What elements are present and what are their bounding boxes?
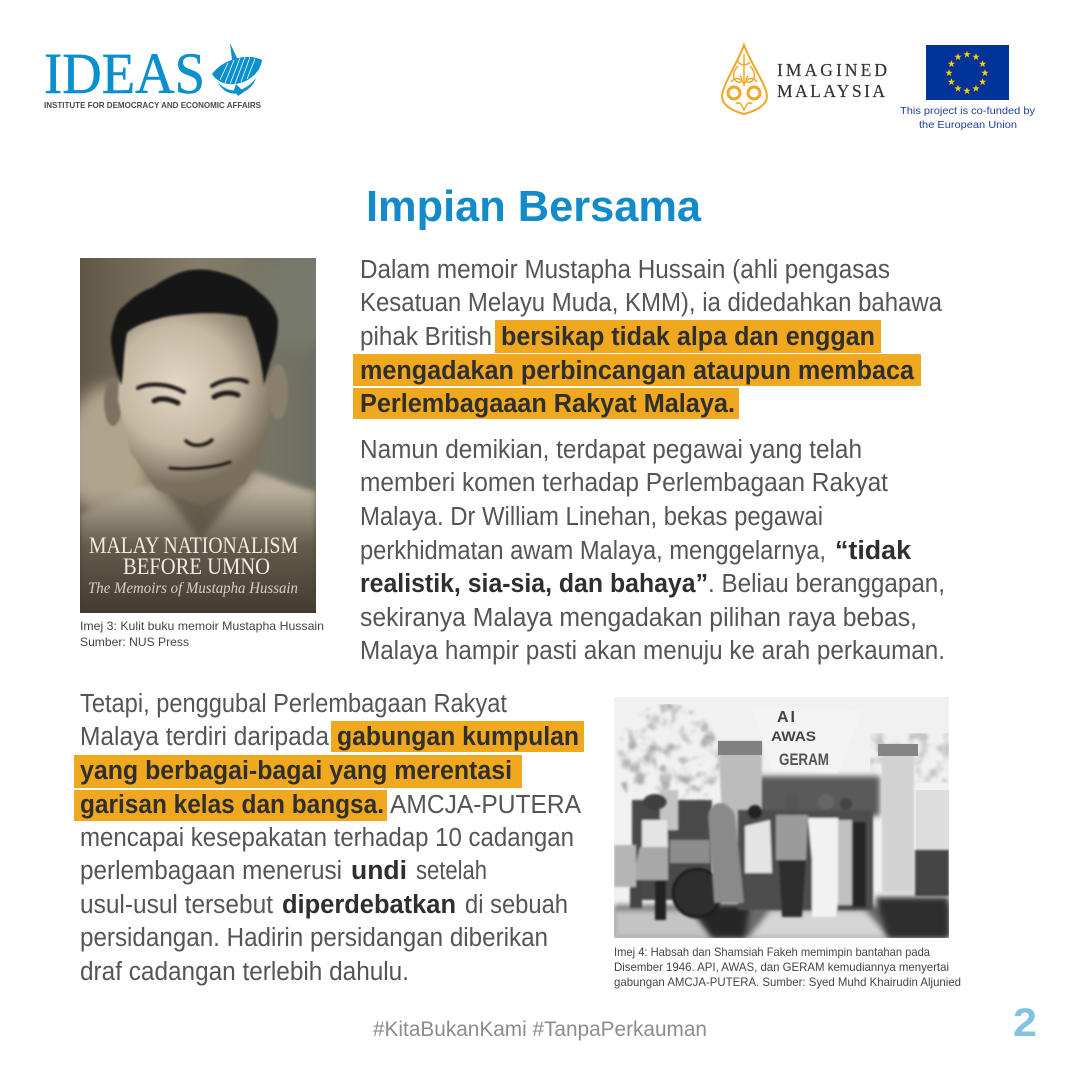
caption: image 4: Disember 1946. API, AWAS, dan GERAM kemudiannya menyertai [614, 960, 949, 974]
text block: paragraph 2 [360, 436, 945, 665]
banner: AWAS [771, 728, 816, 744]
book title [88, 533, 298, 597]
image: protest photo [614, 697, 949, 938]
text block: paragraph 2: Namun demikian, terdapat pegawai yang telah [360, 436, 862, 464]
trees [616, 704, 720, 800]
funding note [900, 105, 1036, 131]
text block: paragraph 3: persidangan. Hadirin persidangan diberikan [80, 924, 548, 952]
text block: paragraph 3: Tetapi, penggubal Perlembagaan Rakyat [80, 690, 507, 718]
bicycle group [614, 790, 721, 920]
text block: paragraph 3: garisan kelas dan bangsa. [80, 791, 384, 819]
logo: Imagined Malaysia [722, 45, 887, 114]
text block: paragraph 2: realistik, sia-sia, dan bahaya” [360, 570, 708, 598]
gate pillars [718, 741, 762, 850]
image: book cover [80, 258, 316, 613]
text block: paragraph 1: mengadakan perbincangan ataupun membaca [360, 357, 915, 385]
page number: 2 [1013, 1001, 1037, 1045]
text block: paragraph 1: bersikap tidak alpa dan enggan [501, 323, 875, 351]
caption: image 3 [80, 619, 324, 649]
book title: MALAY NATIONALISM [89, 533, 298, 558]
logo: Imagined Malaysia: MALAYSIA [777, 81, 885, 101]
hashtags: #KitaBukanKami #TanpaPerkauman [373, 1018, 707, 1041]
text block: paragraph 2: “tidak [835, 537, 912, 565]
text block: paragraph 3 [74, 690, 584, 986]
book title: BEFORE UMNO [123, 554, 270, 579]
funding note: the European Union [919, 119, 1017, 131]
text block: paragraph 3: mencapai kesepakatan terhadap 10 cadangan [80, 824, 574, 852]
text block: paragraph 3: yang berbagai-bagai yang merentasi [80, 757, 512, 785]
text block: paragraph 3: perlembagaan menerusi [80, 857, 342, 885]
text block: paragraph 3: di sebuah [465, 891, 568, 919]
text block: paragraph 2: . Beliau beranggapan, [708, 570, 945, 598]
icon: wayang leaf [722, 45, 767, 114]
banner [761, 711, 838, 774]
text block: paragraph 2: Malaya. Dr William Linehan, bekas pegawai [360, 503, 823, 531]
caption: image 4 [614, 945, 961, 989]
logo: European Union flag [926, 45, 1009, 100]
banner: A I [777, 709, 795, 726]
text block: paragraph 1: Dalam memoir Mustapha Hussain (ahli pengasas [360, 256, 890, 284]
caption: image 3: Sumber: NUS Press [80, 635, 189, 649]
face [118, 310, 271, 507]
logo: Imagined Malaysia: IMAGINED [777, 60, 887, 80]
text block: paragraph 3: setelah [416, 857, 487, 885]
text block: paragraph 3: gabungan kumpulan [337, 723, 579, 751]
text block: paragraph 3: undi [351, 857, 407, 885]
text block: paragraph 3: draf cadangan terlebih dahulu. [80, 958, 409, 986]
banner: GERAM [779, 750, 829, 769]
text block: paragraph 3: Malaya terdiri daripada [80, 723, 330, 751]
caption: image 4: Imej 4: Habsah dan Shamsiah Fakeh memimpin bantahan pada [614, 945, 930, 959]
highlight bars [74, 721, 584, 821]
text block: paragraph 1: Kesatuan Melayu Muda, KMM), ia didedahkan bahawa [360, 289, 943, 317]
logo: IDEAS: INSTITUTE FOR DEMOCRACY AND ECONOMIC AFFAIRS [44, 101, 262, 110]
caption: image 3: Imej 3: Kulit buku memoir Mustapha Hussain [80, 619, 324, 633]
icon: IDEAS bird [212, 43, 262, 96]
ears [104, 378, 122, 426]
eyes, brows, nose, mouth [138, 379, 247, 469]
text block: paragraph 2: perkhidmatan awam Malaya, menggelarnya, [360, 537, 826, 565]
ground [614, 905, 949, 938]
text block: paragraph 3: AMCJA-PUTERA [390, 791, 581, 819]
text block: paragraph 2: sekiranya Malaya mengadakan pilihan raya bebas, [360, 604, 917, 632]
text block: paragraph 1: pihak British [360, 323, 492, 351]
logo: IDEAS: IDEAS [44, 41, 205, 106]
shirt [80, 469, 316, 598]
text block: paragraph 1: Perlembagaaan Rakyat Malaya. [360, 390, 735, 418]
book title: The Memoirs of Mustapha Hussain [88, 580, 298, 597]
funding note: This project is co-funded by [900, 105, 1036, 117]
text block: paragraph 1 [353, 256, 943, 419]
caption: image 4: gabungan AMCJA-PUTERA. Sumber: Syed Muhd Khairudin Aljunied [614, 975, 961, 989]
title: Impian Bersama [366, 182, 702, 231]
text block: paragraph 3: diperdebatkan [282, 891, 456, 919]
text block: paragraph 2: Malaya hampir pasti akan menuju ke arah perkauman. [360, 637, 945, 665]
women group [708, 794, 873, 917]
highlight bars [353, 320, 921, 419]
hair [111, 269, 278, 385]
neck shadow [142, 467, 260, 526]
text block: paragraph 2: memberi komen terhadap Perlembagaan Rakyat [360, 469, 888, 497]
text block: paragraph 3: usul-usul tersebut [80, 891, 273, 919]
